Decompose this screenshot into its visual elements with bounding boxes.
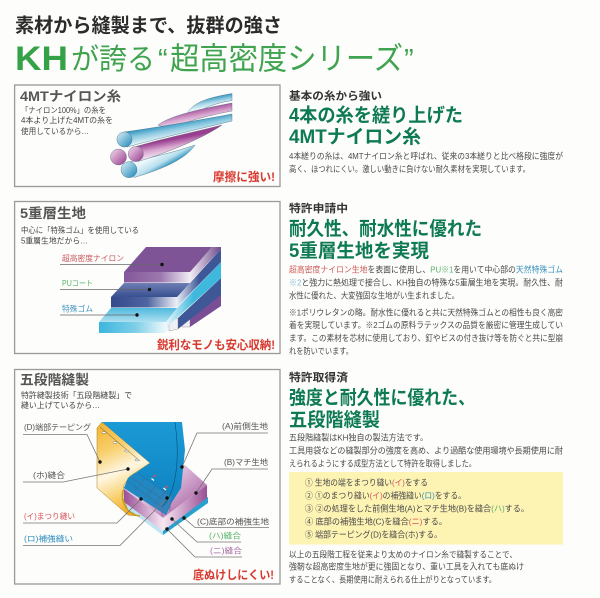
body text: 超高密度ナイロン生地を表面に使用し、PU※1を用いて中心部の天然特殊ゴム	[289, 264, 563, 274]
panel description: 「ナイロン100%」の糸を	[21, 105, 106, 115]
green heading: 4本の糸を縒り上げた	[289, 104, 463, 126]
label: special rubber: 特殊ゴム	[62, 304, 93, 314]
green heading: 5重層生地を実現	[289, 240, 429, 262]
text block: 4MT nylon: 基本の糸から強い	[289, 88, 382, 102]
label: ni seam	[165, 527, 242, 557]
step list box: ① 生地の端をまつり縫い(イ)をする	[305, 478, 428, 488]
panel: 4MT nylon	[15, 85, 280, 186]
panel description	[21, 225, 139, 246]
label: C bottom reinforcement	[182, 516, 269, 528]
label: PU coat	[60, 279, 151, 291]
body text	[289, 264, 564, 356]
label: ha seam	[170, 517, 241, 542]
green heading	[289, 387, 475, 431]
green heading	[289, 218, 482, 262]
label: D taping	[23, 422, 102, 464]
body text	[289, 151, 564, 174]
body text: 水性に優れた、大変強固な生地がい生まれました。	[289, 290, 459, 300]
label: special rubber	[60, 304, 139, 317]
panel heading: 5重層生地	[20, 205, 87, 221]
label: D taping: (D)端部テーピング	[24, 422, 91, 432]
label: B gusset fabric	[194, 457, 268, 495]
panel description: 使用しているから…	[21, 126, 89, 136]
layered fabric diagram	[99, 247, 221, 333]
label: ro stitch	[23, 496, 169, 546]
green heading: 耐久性、耐水性に優れた	[289, 218, 482, 240]
step list box: ⑤ 端部テーピング(D)を縫合(ホ)する。	[305, 530, 442, 540]
label: A front fabric: (A)前側生地	[222, 421, 268, 431]
body text: 4本縒りの糸は、4MTナイロン糸と呼ばれ、従来の3本縒りと比べ格段に強度が	[289, 151, 564, 161]
callout: 底ぬけしにくい!	[193, 567, 274, 582]
body text: れを防いでいます。	[289, 346, 353, 356]
label: PU coat: PUコート	[62, 279, 93, 288]
intro text: 五段階縫製はKH独自の製法方法です。	[289, 432, 428, 442]
panel description: 5重層生地だから…	[21, 236, 88, 246]
green heading: 4MTナイロン糸	[289, 126, 421, 148]
headline line 2: ”	[404, 44, 414, 76]
label: ha seam: (ハ)縫合	[209, 530, 241, 540]
closing text: することなく、長期使用に耐えられる仕上がりとなっています。	[289, 574, 496, 584]
step list box: ④ 底部の補強生地(C)を縫合(ニ)する。	[305, 516, 447, 526]
label: C bottom reinforcement: (C)底部の補強生地	[197, 516, 269, 526]
closing text: 以上の五段階工程を従来より太めのナイロン糸で縫製することで、	[289, 550, 517, 560]
headline line 1: 素材から縫製まで、抜群の強さ	[15, 15, 282, 37]
body text: ※2と強力に熱処理で接合し、KH独自の特殊な5重層生地を実現。耐久性、耐	[289, 278, 564, 288]
intro text: えられるようにする成型方法として特許を取得しました。	[289, 458, 476, 468]
text block: five-step sewing: 特許取得済	[289, 370, 348, 384]
body text: 着を実現しています。※2ゴムの原料ラテックスの品質を厳密に管理生成してい	[289, 320, 563, 330]
label: i stitch	[23, 497, 143, 523]
panel description: 中心に「特殊ゴム」を使用している	[21, 225, 139, 235]
panel heading: 五段階縫製	[20, 372, 90, 388]
panel description	[21, 105, 113, 136]
title	[15, 15, 414, 78]
panel description	[21, 390, 132, 410]
body text: 高く、ほつれにくい。激しい動きに負けない耐久素材を実現しています。	[289, 164, 530, 174]
headline line 2: 超高密度シリーズ	[170, 42, 403, 76]
panel: five-step sewing	[15, 370, 280, 584]
callout: 鋭利なモノも安心収納!	[157, 337, 275, 352]
body text: ※1ポリウレタンの略。耐水性に優れると共に天然特殊ゴムとの相性も良く高密	[289, 308, 564, 318]
panel description: 4本より上げた4MTの糸を	[21, 115, 113, 125]
headline line 2: “	[158, 44, 168, 76]
label: ro stitch: (ロ)補強縫い	[24, 534, 73, 544]
text block: 4MT nylon	[289, 88, 564, 174]
headline line 2: が誇る	[71, 43, 155, 76]
intro text: 工具用袋などの縫製部分の強度を高め、より過酷な使用環境や長期使用に耐	[289, 446, 564, 456]
panel description: 特許縫製技術「五段階縫製」で	[21, 390, 132, 400]
seam cross-section diagram	[97, 422, 208, 535]
text block: five-layer fabric: 特許申請中	[289, 201, 348, 215]
label: A front fabric	[180, 421, 268, 469]
headline line 2: KH	[15, 40, 68, 78]
closing text	[289, 550, 524, 584]
icon: twisted yarn strands	[110, 94, 232, 178]
label: ni seam: (ニ)縫合	[210, 546, 242, 556]
headline line 2	[15, 40, 414, 78]
green heading	[289, 104, 463, 148]
label: i stitch: (イ)まつり縫い	[24, 511, 75, 521]
label: nylon	[60, 253, 164, 266]
step list box: ③ ②の処理をした前側生地(A)とマチ生地(B)を縫合(ハ)する。	[305, 504, 529, 514]
step list box	[289, 472, 563, 544]
closing text: 強靭な超高密度生地が更に強固となり、重い工具を入れても底ぬけ	[289, 562, 524, 572]
step list box: ② ①のまつり縫い(イ)の補強縫い(ロ)をする。	[305, 490, 466, 500]
panel: five-layer fabric	[15, 202, 280, 354]
label: ho seam	[23, 467, 130, 482]
green heading: 強度と耐久性に優れた、	[289, 387, 475, 409]
callout: 摩擦に強い!	[213, 169, 275, 184]
yarn ends	[110, 132, 143, 178]
panel description: 縫い上げているから…	[21, 400, 100, 410]
intro text	[289, 432, 564, 468]
label: nylon: 超高密度ナイロン	[62, 253, 124, 263]
label: B gusset fabric: (B)マチ生地	[224, 457, 268, 467]
text block: five-step sewing	[289, 370, 564, 584]
panel heading: 4MTナイロン糸	[20, 88, 122, 104]
label: ho seam: (ホ)縫合	[33, 470, 65, 480]
green heading: 五段階縫製	[289, 409, 380, 431]
body text: ます。この素材を芯材に使用しており、釘やビスの付き抜け等を防ぐと共に型崩	[289, 333, 563, 343]
text block: five-layer fabric	[289, 201, 564, 356]
